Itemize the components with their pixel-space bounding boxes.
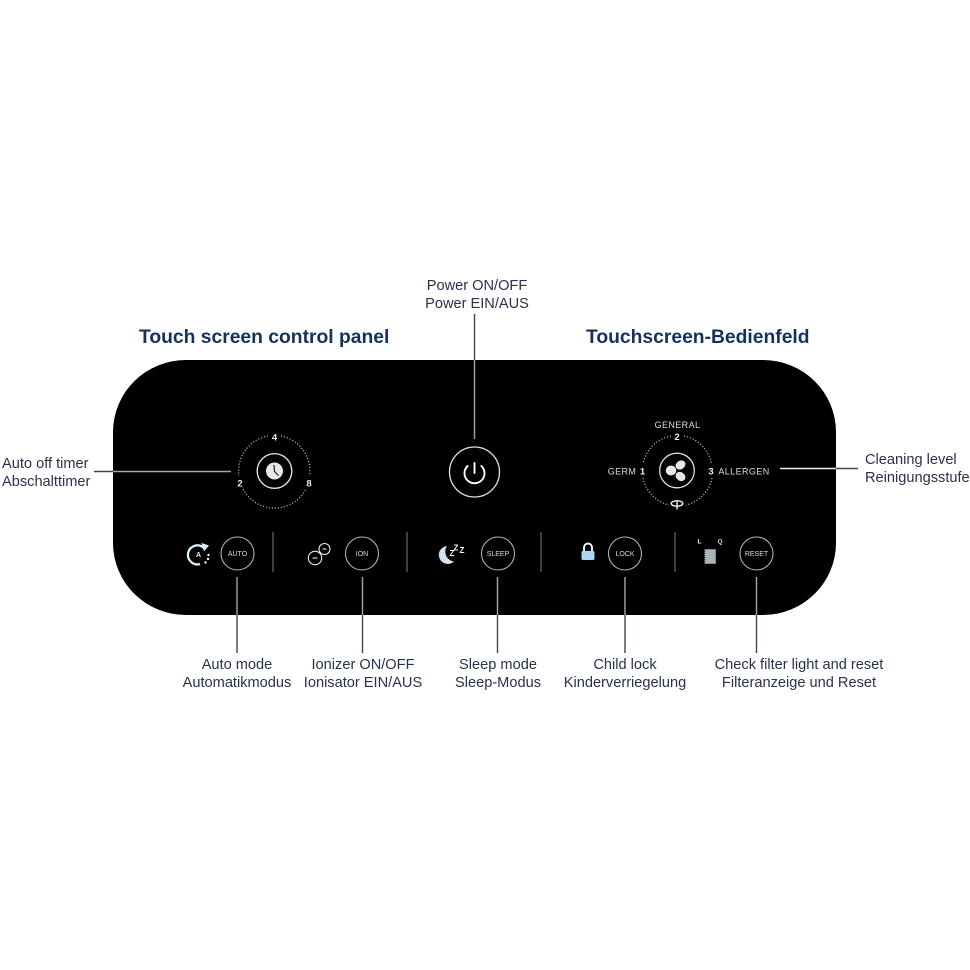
button: auto: AUTO bbox=[228, 551, 248, 558]
filter controls bbox=[698, 537, 773, 570]
level labels: GERM bbox=[608, 466, 636, 476]
ion controls bbox=[308, 537, 378, 570]
label: power bbox=[425, 278, 529, 312]
label: child lock bbox=[564, 657, 686, 691]
label: ionizer: Ionisator EIN/AUS bbox=[304, 675, 422, 691]
icon: padlock bbox=[582, 544, 594, 560]
sleep controls bbox=[439, 537, 514, 570]
leader lines outside panel bbox=[94, 314, 858, 653]
heading: German panel title: Touchscreen-Bedienfeld bbox=[586, 327, 810, 348]
label: auto mode: Automatikmodus bbox=[183, 675, 291, 691]
level labels bbox=[608, 420, 770, 476]
label: power: Power ON/OFF bbox=[427, 278, 527, 294]
level numbers: 3 bbox=[708, 466, 714, 478]
label: check filter: Check filter light and reset bbox=[715, 657, 883, 673]
panel: black touch screen bbox=[113, 360, 836, 615]
button: lock: LOCK bbox=[615, 551, 635, 558]
button: sleep: SLEEP bbox=[487, 551, 510, 558]
label: sleep mode: Sleep mode bbox=[459, 657, 537, 673]
button: ion: ION bbox=[356, 551, 368, 558]
label: auto off timer: Abschalttimer bbox=[2, 474, 90, 490]
icon: filter indicator: L bbox=[698, 538, 702, 546]
icon: moon and zzz: Z bbox=[454, 544, 459, 552]
level numbers bbox=[640, 432, 714, 478]
label: auto off timer: Auto off timer bbox=[2, 456, 89, 472]
label: check filter bbox=[715, 657, 884, 691]
cleaning level dial bbox=[608, 420, 770, 510]
label: check filter: Filteranzeige und Reset bbox=[722, 675, 876, 691]
dial numbers: 2 bbox=[237, 478, 243, 490]
dial numbers: 8 bbox=[306, 478, 312, 490]
label: sleep mode: Sleep-Modus bbox=[455, 675, 541, 691]
icon: moon and zzz: Z bbox=[460, 546, 465, 555]
button: reset: RESET bbox=[745, 551, 769, 558]
level labels: GENERAL bbox=[655, 420, 700, 430]
level labels: ALLERGEN bbox=[718, 466, 770, 476]
icon: power button bbox=[450, 447, 500, 497]
dividers bbox=[273, 532, 675, 572]
icon: fan button bbox=[660, 453, 694, 488]
timer dial bbox=[237, 432, 312, 508]
lock controls bbox=[582, 537, 642, 570]
label: cleaning level: Reinigungsstufe bbox=[865, 470, 970, 486]
leader lines inside panel bbox=[113, 360, 836, 615]
auto mode controls bbox=[188, 537, 254, 570]
heading: English panel title: Touch screen control panel bbox=[139, 327, 389, 348]
label: sleep mode bbox=[455, 657, 541, 691]
label: auto mode bbox=[182, 657, 291, 691]
label: auto mode: Auto mode bbox=[202, 657, 272, 673]
icon: filter indicator: Q bbox=[717, 538, 723, 546]
icon: dotted timer ring bbox=[239, 436, 310, 508]
icon: moon and zzz bbox=[439, 544, 465, 564]
icon: filter indicator bbox=[698, 538, 723, 564]
label: child lock: Kinderverriegelung bbox=[564, 675, 686, 691]
icon: auto cycle arrow: A bbox=[196, 552, 201, 559]
label: power: Power EIN/AUS bbox=[425, 296, 529, 312]
icon: moon and zzz: Z bbox=[450, 549, 455, 558]
icon: dotted level ring bbox=[643, 436, 712, 505]
level numbers: 2 bbox=[674, 432, 680, 443]
icon: ions bbox=[308, 544, 330, 565]
dial numbers bbox=[237, 432, 312, 490]
icon: wifi-style indicator bbox=[671, 501, 683, 510]
label: auto off timer bbox=[2, 456, 90, 490]
label: child lock: Child lock bbox=[593, 657, 657, 673]
label: cleaning level bbox=[865, 452, 970, 486]
label: cleaning level: Cleaning level bbox=[865, 452, 957, 468]
dial numbers: 4 bbox=[272, 432, 278, 444]
label: ionizer bbox=[304, 657, 422, 691]
label: ionizer: Ionizer ON/OFF bbox=[312, 657, 414, 673]
level numbers: 1 bbox=[640, 466, 646, 478]
icon: clock button bbox=[257, 454, 292, 488]
